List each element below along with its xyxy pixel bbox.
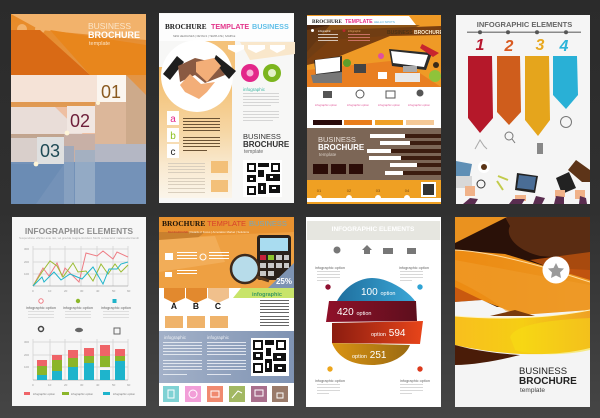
number 02 <box>67 106 95 133</box>
legend markers <box>39 299 116 303</box>
heading: TEMPLATE <box>207 219 246 228</box>
lens flare lights <box>34 101 100 166</box>
bar axis labels: 300 <box>24 340 29 344</box>
heading: BUSINESS <box>249 219 287 228</box>
panel: handshake brochure <box>159 13 295 203</box>
brochure heading: TEMPLATE <box>211 22 249 31</box>
A B C: C <box>215 301 221 311</box>
numbers: 4 <box>559 38 569 55</box>
icons row <box>334 245 416 254</box>
axis labels: 100 <box>24 272 29 276</box>
laptop icon <box>311 56 342 83</box>
cover title: template <box>520 387 545 394</box>
25% corner <box>268 263 294 288</box>
header text <box>311 29 370 41</box>
axis labels: 40 <box>96 289 100 293</box>
number 03 <box>37 137 64 164</box>
heading <box>162 221 286 226</box>
lower text <box>168 163 205 193</box>
segmented circle <box>326 278 423 365</box>
heading: INFOGRAPHIC ELEMENTS <box>25 226 133 236</box>
number 01 <box>97 75 126 102</box>
orange footer: 03 <box>376 188 381 193</box>
panel: circular infographic <box>306 217 441 407</box>
axis labels: 50 <box>112 289 116 293</box>
options: infographic option <box>101 306 131 310</box>
infographic green tag: infographic <box>252 292 282 298</box>
infographic text block: infographic <box>243 87 266 92</box>
blue section text: infographic <box>207 335 230 340</box>
segmented circle: 420 option <box>337 307 371 318</box>
panel: brochure cover 01 02 03 <box>11 14 146 204</box>
orange footer: 04 <box>405 188 410 193</box>
section title: template <box>319 152 337 157</box>
top option texts: infographic option <box>315 266 345 270</box>
top option texts <box>315 266 429 281</box>
business brochure title <box>243 132 290 155</box>
pink option labels: infographic option <box>347 103 369 107</box>
icons row <box>38 326 120 334</box>
bar axis labels <box>24 340 131 387</box>
axis labels: 0 <box>32 289 34 293</box>
orange footer: 02 <box>347 188 352 193</box>
star badge <box>542 256 570 284</box>
segmented circle: option 594 <box>371 328 406 339</box>
contact icons <box>323 90 424 98</box>
cover title: BROCHURE <box>519 376 577 387</box>
bar axis labels: 40 <box>96 383 100 387</box>
options: infographic option <box>26 306 56 310</box>
heading: BROCHURE <box>162 219 205 228</box>
bar axis labels: 100 <box>24 365 29 369</box>
bottom option texts <box>315 379 430 394</box>
A B C: B <box>193 301 199 311</box>
heading: INFOGRAPHIC ELEMENTS <box>477 20 572 29</box>
right text <box>260 300 289 326</box>
business brochure title: template <box>244 149 263 155</box>
numbers: 3 <box>536 37 545 54</box>
numbers <box>476 39 568 51</box>
options: infographic option <box>63 306 93 310</box>
coloured dots <box>325 284 423 372</box>
QR code <box>251 338 289 376</box>
brown section <box>307 128 441 180</box>
pink option labels: infographic option <box>315 103 337 107</box>
brochure heading <box>165 22 289 31</box>
hand pointer icon <box>537 143 543 154</box>
panel: orange wave cover <box>455 217 590 407</box>
axis labels: 60 <box>127 289 131 293</box>
top heading strip: HELLO SPOTS <box>374 20 395 24</box>
number 01: 01 <box>101 82 121 102</box>
bar axis labels: 200 <box>24 353 29 357</box>
brochure heading: BUSINESS <box>252 22 289 31</box>
grey header <box>307 221 440 240</box>
calculator <box>257 235 291 280</box>
business brochure label: BUSINESS BROCHURE <box>387 30 444 36</box>
small icons <box>475 116 572 149</box>
bottom colour icons <box>163 386 288 402</box>
A B C: A <box>171 301 177 311</box>
a b c labels: a <box>170 114 176 125</box>
panel: charts infographic <box>12 217 146 406</box>
orange footer <box>307 180 441 204</box>
ribbon arrows <box>468 56 578 136</box>
cover title: BROCHURE <box>88 30 140 40</box>
desk objects <box>343 44 441 82</box>
blue section text <box>163 335 246 375</box>
option tags <box>228 45 285 53</box>
cover title <box>88 23 140 46</box>
A B C <box>171 303 221 309</box>
number 03: 03 <box>40 141 60 161</box>
dark squares <box>313 164 363 174</box>
panel: calculator brochure <box>159 217 294 406</box>
magnifier <box>231 255 269 283</box>
header text: infographic <box>348 29 361 33</box>
bar axis labels: 20 <box>64 383 68 387</box>
a b c text <box>183 118 220 151</box>
section title <box>318 137 364 157</box>
QR code <box>243 160 282 197</box>
bar legend <box>24 392 136 396</box>
bottom option texts: infographic option <box>315 379 345 383</box>
numbers: 1 <box>476 37 485 54</box>
bar axis labels: 0 <box>32 383 34 387</box>
axis labels: 300 <box>24 247 29 251</box>
axis labels <box>24 247 131 293</box>
infographic green tag <box>233 288 294 298</box>
business brochure title: BUSINESS <box>243 132 281 141</box>
pink option labels: infographic option <box>408 103 430 107</box>
cover title <box>519 366 577 394</box>
panel: laptop brochure <box>307 15 444 204</box>
round icons <box>241 64 281 82</box>
bar axis labels: 50 <box>112 383 116 387</box>
bar axis labels: 10 <box>48 383 52 387</box>
a b c labels: c <box>170 147 176 158</box>
timeline <box>467 30 581 34</box>
a b c labels <box>167 111 179 158</box>
bar legend: infographic option <box>113 392 136 396</box>
folder icons <box>211 161 228 192</box>
bar axis labels: 30 <box>80 383 84 387</box>
infographic text block <box>243 87 279 121</box>
segmented circle: option 251 <box>352 350 387 361</box>
axis labels: 10 <box>48 289 52 293</box>
top heading strip: TEMPLATE <box>345 19 373 25</box>
section title: BROCHURE <box>318 143 365 152</box>
bottom option texts: infographic option <box>400 379 430 383</box>
horizontal bars <box>367 134 441 175</box>
menu: BACKGROUND | Details of Focus | Annotation Market | Solutions <box>168 230 250 234</box>
desktop monitor icon <box>389 49 432 72</box>
section title: BUSINESS <box>318 135 356 144</box>
stacked bar chart <box>33 339 128 380</box>
a b c labels: b <box>170 131 176 142</box>
axis labels: 30 <box>80 289 84 293</box>
brochure heading: BROCHURE <box>165 23 207 31</box>
top heading strip: BROCHURE <box>312 19 343 25</box>
cover title: template <box>89 41 110 47</box>
header text: infographic <box>318 29 331 33</box>
bar axis labels: 60 <box>127 383 131 387</box>
colour bars <box>313 120 434 125</box>
grey header: INFOGRAPHIC ELEMENTS <box>332 226 415 233</box>
cover title: BUSINESS <box>519 366 567 377</box>
panel: infographic elements 1 2 3 4 <box>456 15 590 204</box>
contact items <box>165 252 229 277</box>
option tags <box>164 288 229 303</box>
subheading: Suspendisse efficitur ante nisi, vel gravida magna tincidunt. Morbi consectetur malesuada blandit <box>19 236 139 240</box>
bar legend: infographic option <box>33 392 56 396</box>
axis labels: 20 <box>64 289 68 293</box>
cover title: BUSINESS <box>88 21 131 31</box>
folders <box>165 316 228 328</box>
number 02: 02 <box>70 111 90 131</box>
top heading strip <box>307 16 416 25</box>
axis labels: 200 <box>24 260 29 264</box>
25% corner: 25% <box>276 277 292 286</box>
line chart <box>33 246 128 286</box>
segmented circle: 100 option <box>361 287 395 298</box>
options <box>26 306 131 310</box>
numbers: 2 <box>504 38 514 55</box>
desk scene <box>456 160 590 204</box>
option text <box>28 311 129 318</box>
bar legend: infographic option <box>71 392 94 396</box>
pink option labels <box>315 104 430 106</box>
circle with handshake <box>161 40 236 112</box>
orange footer: 01 <box>317 188 322 193</box>
menu line: NEW HEADLINES | DETAILS | TEMPLATE | SAMPLE <box>173 34 236 38</box>
pink option labels: infographic option <box>378 103 400 107</box>
top option texts: infographic option <box>399 266 429 270</box>
blue section text: infographic <box>164 335 187 340</box>
business brochure title: BROCHURE <box>243 140 290 149</box>
